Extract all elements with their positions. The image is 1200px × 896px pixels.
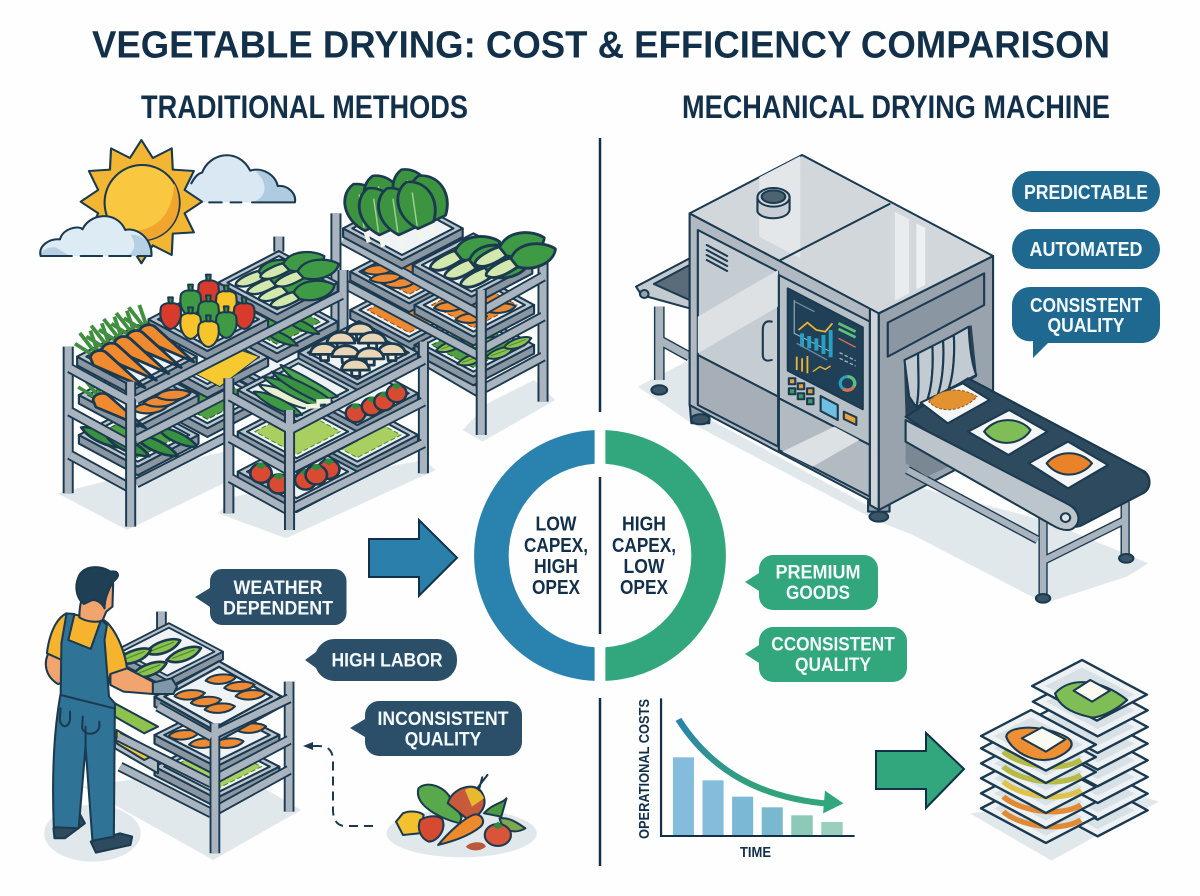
pill: automated: AUTOMATED (1030, 239, 1142, 261)
touchscreen (788, 288, 863, 409)
bubble: inconsistent quality: INCONSISTENT (378, 708, 509, 730)
arrow: dashed feedback (303, 742, 373, 826)
pill: predictable: PREDICTABLE (1024, 182, 1148, 204)
title: VEGETABLE DRYING: COST & EFFICIENCY COMPARISON (92, 24, 1110, 66)
text: low capex high opex: OPEX (532, 577, 581, 599)
outfeed conveyor (906, 378, 1149, 603)
infeed conveyor (636, 258, 690, 395)
heading: mechanical drying machine: MECHANICAL DRYING MACHINE (682, 89, 1110, 125)
bubble: inconsistent quality (350, 701, 522, 756)
control panel buttons (789, 378, 856, 425)
y axis label: OPERATIONAL COSTS (636, 699, 653, 839)
pill: predictable (1012, 171, 1160, 212)
bubble: consistent quality: QUALITY (1048, 315, 1125, 337)
arrow: green to packaged goods (876, 733, 964, 808)
icon: cloud in front of sun (40, 216, 151, 256)
text: high capex low opex: HIGH (622, 514, 666, 536)
bubble: consistent quality (1012, 287, 1160, 358)
rack: left with carrots, peppers, bok choy (57, 237, 341, 530)
chart: operational costs over time (636, 698, 855, 861)
icon: sun (81, 140, 202, 263)
heading: traditional methods: TRADITIONAL METHODS (141, 89, 468, 125)
bubble: high labor: HIGH LABOR (332, 650, 442, 672)
pill: automated (1012, 229, 1160, 269)
bubble: consistent quality: CONSISTENT (1030, 295, 1142, 317)
arrow: blue to donut (369, 520, 457, 596)
illustration: vegetable pile (386, 775, 537, 857)
bubble: weather dependent (195, 569, 346, 625)
machine body (690, 155, 993, 522)
illustration: mechanical drying machine (636, 155, 1149, 603)
bubble: weather dependent: WEATHER (234, 577, 322, 599)
bubble: premium goods (745, 555, 878, 610)
illustration: stacked vacuum pouches (970, 660, 1159, 861)
trend arrow (678, 719, 843, 813)
bubble: premium goods: PREMIUM (776, 562, 860, 584)
worker (46, 567, 177, 853)
bubble: premium goods: GOODS (786, 582, 850, 604)
icon: cloud behind sun (183, 155, 295, 202)
illustration: worker at drying rack (44, 567, 301, 862)
bubble: high labor (305, 639, 457, 681)
bubble: weather dependent: DEPENDENT (223, 598, 333, 620)
rack with trays (44, 612, 301, 862)
bubble: consistent quality green: CCONSISTENT (771, 634, 895, 656)
rack: front centre with mushrooms, leeks, tomatoes (218, 321, 436, 538)
text: low capex high opex: LOW (536, 514, 577, 536)
text: low capex high opex: HIGH (534, 556, 578, 578)
rack: back right with greens (336, 169, 556, 442)
bubble: inconsistent quality: QUALITY (405, 728, 481, 750)
right stack (1032, 660, 1148, 836)
bubble: consistent quality green: QUALITY (795, 654, 871, 676)
illustration: weather and drying racks (40, 140, 556, 538)
text: low capex high opex (524, 514, 588, 599)
text: high capex low opex: OPEX (620, 577, 669, 599)
text: low capex high opex: CAPEX, (524, 535, 588, 557)
text: high capex low opex: CAPEX, (612, 535, 676, 557)
bars (673, 757, 843, 836)
x axis label: TIME (740, 845, 771, 861)
bubble: consistent quality green (745, 627, 907, 682)
text: high capex low opex (612, 514, 676, 599)
text: high capex low opex: LOW (624, 556, 665, 578)
left stack (981, 710, 1096, 843)
chart: capex opex donut (474, 430, 726, 681)
